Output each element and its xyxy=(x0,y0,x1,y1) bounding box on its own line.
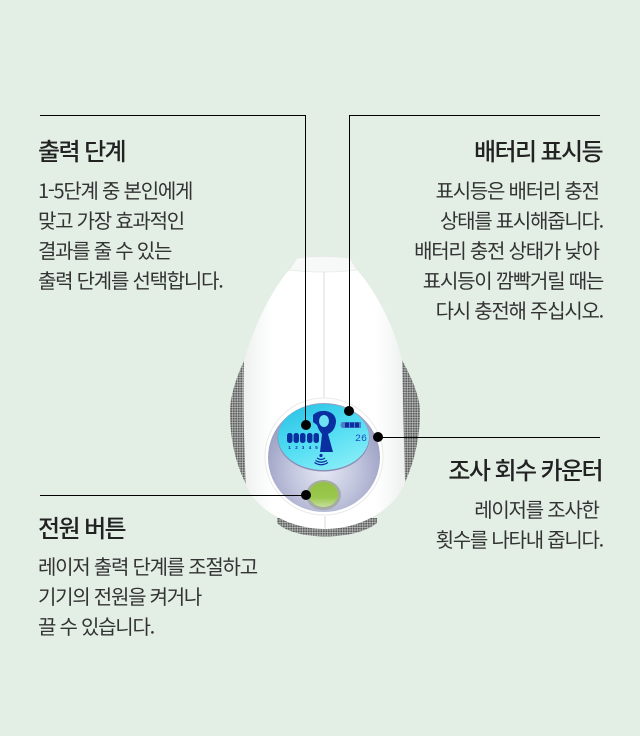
heading: battery indicator: 배터리 표시등 xyxy=(474,132,602,167)
white device body xyxy=(244,256,405,529)
text: power button xyxy=(38,551,258,640)
power button xyxy=(306,480,341,510)
text: output level: 맞고 가장 효과적인 xyxy=(38,205,184,234)
level numbers: 3 xyxy=(302,445,305,450)
heading: output level: 출력 단계 xyxy=(38,132,125,167)
text: battery indicator: 표시등은 배터리 충전 xyxy=(436,175,599,204)
text: battery indicator xyxy=(414,175,604,324)
text: power button: 기기의 전원을 켜거나 xyxy=(38,581,201,610)
level numbers: 5 xyxy=(315,445,318,450)
icon: output level bars xyxy=(287,433,319,443)
text: output level: 1-5단계 중 본인에게 xyxy=(38,175,192,204)
text: output level xyxy=(38,175,223,294)
text: output level: 출력 단계를 선택합니다. xyxy=(38,265,223,294)
callout: power line xyxy=(40,490,311,500)
text: battery indicator: 상태를 표시해줍니다. xyxy=(440,205,603,234)
text: battery indicator: 배터리 충전 상태가 낮아 xyxy=(414,235,599,264)
level numbers: 2 xyxy=(295,445,298,450)
speaker grilles xyxy=(230,360,420,536)
top cap xyxy=(289,256,357,272)
callout: counter line xyxy=(373,432,600,442)
text: battery indicator: 표시등이 깜빡거릴 때는 xyxy=(423,265,603,294)
callout: battery line xyxy=(344,116,600,416)
text: shot counter: 횟수를 나타내 줍니다. xyxy=(436,524,603,553)
LCD screen xyxy=(278,404,370,472)
icon: waves xyxy=(314,454,328,465)
text: battery indicator: 다시 충전해 주십시오. xyxy=(436,295,603,324)
callout: output level line xyxy=(40,116,311,430)
icon: handset xyxy=(313,411,336,452)
heading: power button: 전원 버튼 xyxy=(38,509,125,544)
text: output level: 결과를 줄 수 있는 xyxy=(38,235,171,264)
control panel recess xyxy=(265,398,383,515)
level numbers: 4 xyxy=(309,445,312,450)
text: shot counter xyxy=(436,494,603,553)
text: power button: 끌 수 있습니다. xyxy=(38,611,154,640)
level numbers xyxy=(288,445,318,450)
heading: shot counter: 조사 회수 카운터 xyxy=(448,451,602,486)
shot counter: 26 xyxy=(355,434,367,445)
icon: battery xyxy=(340,422,361,428)
text: shot counter: 레이저를 조사한 xyxy=(474,494,599,523)
text: power button: 레이저 출력 단계를 조절하고 xyxy=(38,551,257,580)
level numbers: 1 xyxy=(288,445,291,450)
